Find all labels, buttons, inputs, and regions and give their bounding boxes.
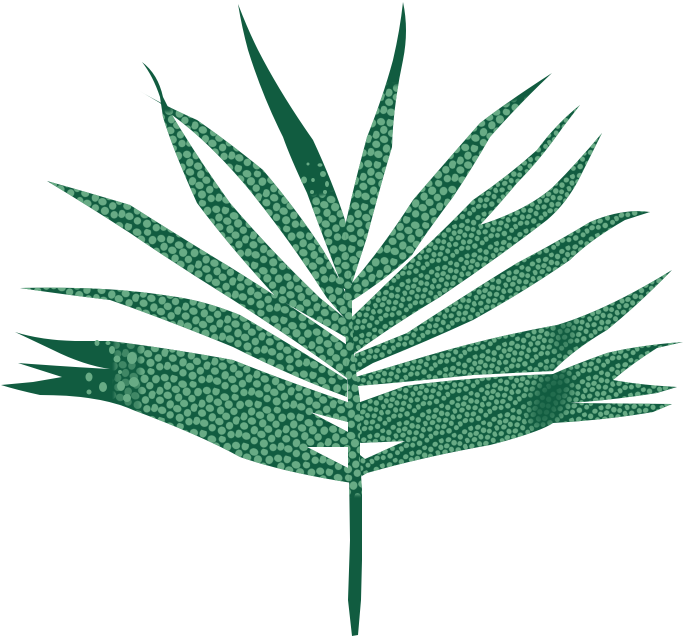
leaflet: right forked: [352, 105, 602, 355]
leaflet: left upper: [47, 181, 347, 378]
leaflet: right middle: [352, 211, 650, 375]
leaflet: right lower: [352, 270, 672, 386]
leaflet: left long: [20, 288, 347, 397]
leaflet: top right: [345, 2, 406, 290]
leaflet: bottom left forked: [1, 332, 352, 483]
leaflet: upper left outer: [138, 90, 348, 322]
leaflet: bottom right forked: [352, 342, 683, 480]
leaflet: right upper: [350, 73, 552, 302]
leaflet: upper left inner: [142, 62, 347, 338]
leaflet: top dark: [238, 4, 350, 292]
stem: [345, 285, 362, 636]
